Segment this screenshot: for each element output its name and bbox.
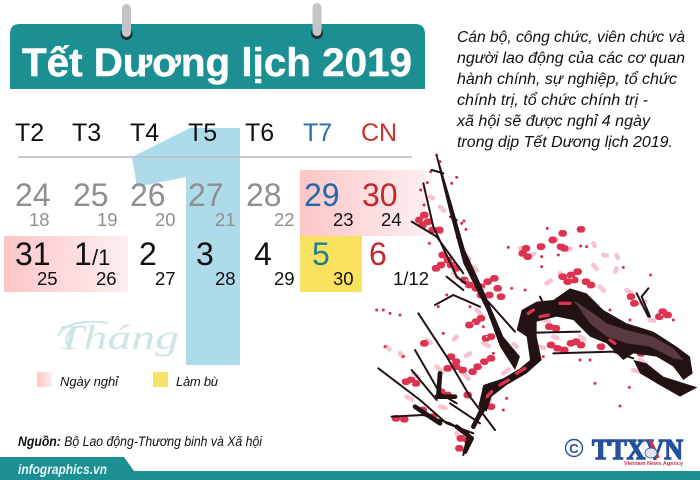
lower-left branches: [378, 313, 495, 455]
red blossom clusters: [395, 215, 669, 448]
calendar week 2: [15, 236, 429, 289]
calendar week 1: 28: [246, 177, 282, 213]
calendar week 1: 21: [215, 209, 236, 230]
weekday header row: T7: [303, 119, 332, 147]
header banner: [10, 24, 425, 89]
calendar week 2: 1: [74, 236, 92, 272]
calendar week 2: 5: [312, 236, 330, 272]
calendar week 2: 28: [215, 268, 236, 289]
calendar week 2: 1/12: [393, 268, 429, 289]
copyright symbol: C: [569, 441, 579, 456]
calendar week 2: 4: [254, 236, 272, 272]
calendar week 2: 27: [155, 268, 176, 289]
plum blossom branch illustration: [377, 155, 697, 455]
header rule: [18, 156, 412, 158]
calendar week 1: 24: [381, 209, 402, 230]
weekday header row: T6: [245, 119, 274, 147]
footer bar: [0, 457, 700, 480]
calendar week 2: 2: [139, 236, 157, 272]
big month numeral 1: [132, 128, 240, 365]
calendar week 1: 20: [155, 209, 176, 230]
trunk shadow: [478, 288, 693, 412]
calendar week 1: 23: [333, 209, 354, 230]
calendar week 1: 30: [362, 177, 398, 213]
calendar week 1: 25: [73, 177, 109, 213]
intro paragraph: trong dịp Tết Dương lịch 2019.: [457, 134, 673, 151]
calendar week 1: 19: [97, 209, 118, 230]
calendar week 1: 22: [274, 209, 295, 230]
calendar week 2: 6: [369, 236, 387, 272]
small scattered buds: [377, 155, 673, 410]
make-up day highlight: [300, 236, 362, 292]
weekday header row: T4: [130, 119, 159, 147]
calendar week 2: /1: [92, 245, 110, 270]
weekday header row: T3: [72, 119, 101, 147]
script word: Tháng: Tháng: [57, 318, 179, 357]
upper main branch: [436, 155, 520, 370]
calendar ring left: [120, 4, 132, 40]
blossom gaps in trunk: [487, 303, 615, 397]
intro paragraph: chính trị, tổ chức chính trị -: [457, 92, 648, 109]
white flecks in clusters: [412, 220, 662, 395]
logo tagline: Vietnam News Agency: [624, 461, 684, 467]
TTXVN logo: TTXVN: [592, 434, 683, 466]
weekday header row: T2: [15, 119, 44, 147]
calendar week 2: 31: [15, 236, 51, 272]
calendar week 2: 29: [274, 268, 295, 289]
weekday header row: [15, 119, 397, 147]
intro paragraph: người lao động của các cơ quan: [457, 50, 685, 67]
legend label: holiday: Ngày nghỉ: [60, 374, 119, 389]
weekday header row: CN: [361, 119, 397, 147]
holiday highlight: 31 December-1 January: [4, 236, 128, 292]
calendar week 2: 30: [333, 268, 354, 289]
footer site name: infographics.vn: [18, 461, 107, 477]
calendar week 2: 25: [37, 268, 58, 289]
intro paragraph: Cán bộ, công chức, viên chức và: [457, 29, 685, 46]
calendar week 1: 26: [130, 177, 166, 213]
source note: Nguồn: Bộ Lao động-Thương binh và Xã hội: [18, 434, 263, 449]
calendar week 2: 3: [196, 236, 214, 272]
legend swatch: make-up day: [153, 372, 168, 387]
weekday header row: T5: [188, 119, 217, 147]
calendar ring right: [311, 3, 323, 39]
calendar week 2: 26: [96, 268, 117, 289]
holiday highlight: 29-30 December: [300, 170, 426, 236]
pale petals: [387, 197, 672, 440]
calendar week 1: [15, 177, 402, 230]
tail of trunk: [633, 360, 697, 397]
intro paragraph: hành chính, sự nghiệp, tổ chức: [457, 71, 677, 88]
intro paragraph: xã hội sẽ được nghỉ 4 ngày: [456, 113, 651, 130]
calendar week 1: 24: [15, 177, 51, 213]
calendar week 1: 18: [29, 209, 50, 230]
legend swatch: holiday: [37, 372, 52, 387]
copyright symbol: [566, 440, 582, 456]
legend: [37, 372, 218, 389]
trunk bark: [573, 300, 683, 360]
title: Tết Dương lịch 2019: [22, 41, 412, 85]
calendar week 1: 29: [304, 177, 340, 213]
calendar week 1: 27: [188, 177, 224, 213]
dark branches: [412, 170, 650, 358]
legend label: make-up day: Làm bù: [176, 374, 218, 389]
intro paragraph: [456, 29, 685, 151]
